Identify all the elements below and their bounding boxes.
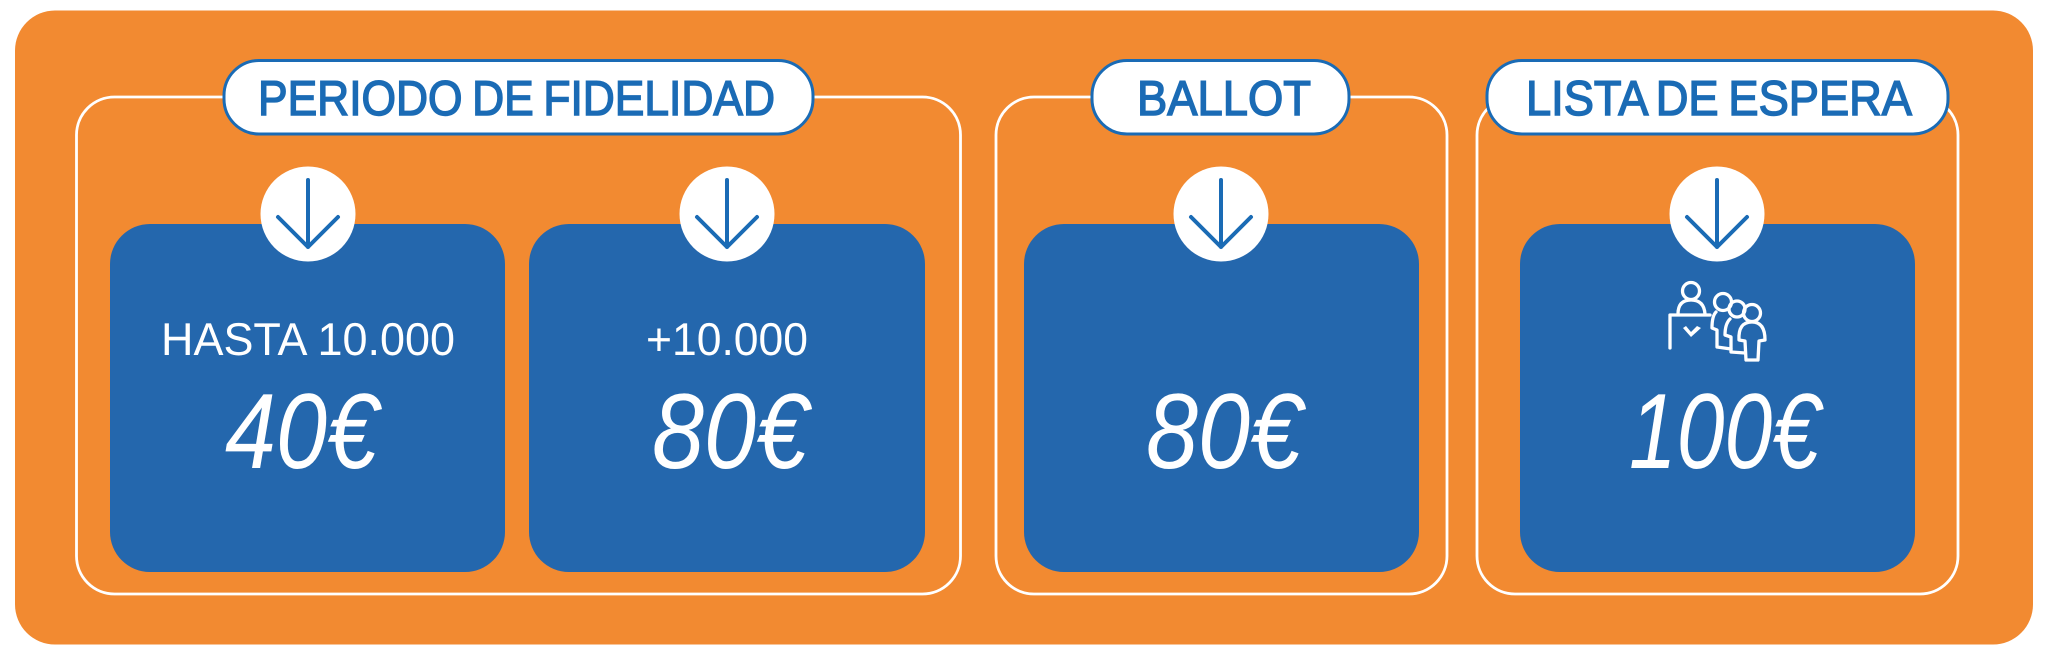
icon: queue at desk — [1670, 282, 1765, 360]
card: ballot price: 80€ — [1146, 371, 1307, 491]
icon: down arrow 4 — [1670, 166, 1764, 262]
card: hasta 10.000 — [110, 224, 505, 572]
icon: down arrow 1 — [260, 166, 356, 262]
icon: down arrow 2 — [680, 166, 774, 262]
icon: down arrow 3 — [1174, 166, 1268, 262]
heading: periodo de fidelidad: PERIODO DE FIDELIDAD — [258, 72, 775, 126]
card: hasta 10.000: 40€ — [225, 371, 383, 491]
card: lista de espera price — [1520, 224, 1915, 572]
frame: periodo de fidelidad — [76, 97, 960, 594]
heading: ballot — [1092, 60, 1349, 134]
panel: periodo de fidelidad — [76, 60, 960, 594]
card: +10.000 — [529, 224, 925, 572]
panel: ballot — [996, 60, 1447, 594]
card: lista de espera price: 100€ — [1629, 371, 1824, 491]
heading: lista de espera: LISTA DE ESPERA — [1526, 72, 1912, 126]
card: hasta 10.000: HASTA 10.000 — [161, 313, 455, 365]
card: ballot price — [1024, 224, 1419, 572]
frame: lista de espera — [1477, 97, 1958, 594]
heading: lista de espera — [1487, 60, 1948, 134]
card: +10.000: 80€ — [652, 371, 813, 491]
heading: periodo de fidelidad — [224, 60, 813, 134]
panel: lista de espera — [1477, 60, 1958, 594]
card: +10.000: +10.000 — [646, 313, 808, 365]
frame: ballot — [996, 97, 1447, 594]
heading: ballot: BALLOT — [1137, 72, 1311, 126]
